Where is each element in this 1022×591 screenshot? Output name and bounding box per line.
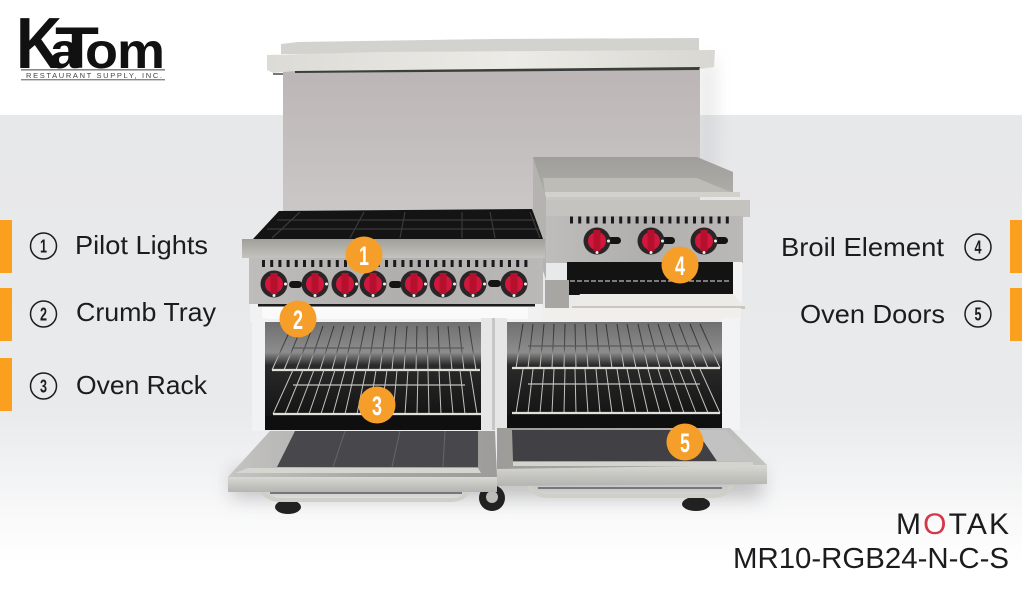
caster wheels [275,485,710,514]
legend item 4: Broil Element: 4 [974,238,982,258]
logo: KaTom Restaurant Supply: a [50,23,80,79]
brand and model number: MR10-RGB24-N-C-S [733,543,1009,575]
callout badge 1 [346,236,382,274]
brand and model number: MOTAK [896,508,1009,541]
legend item 1: Pilot Lights: Pilot Lights [75,230,208,260]
callout badge 4: 4 [675,251,685,281]
callout badge 5 [666,424,704,460]
callout badge 1: 1 [359,241,369,271]
legend item 3: Oven Rack: Oven Rack [76,370,208,400]
callout badge 2 [280,300,316,338]
callout badge 5: 5 [680,428,690,458]
logo: KaTom Restaurant Supply: T [55,16,99,81]
callout badge 4 [662,246,698,284]
legend item 5: Oven Doors: Oven Doors [800,299,945,329]
logo: KaTom Restaurant Supply: K [16,4,62,84]
frame and crumb tray [250,304,741,431]
logo: KaTom Restaurant Supply [16,4,165,84]
logo: KaTom Restaurant Supply: m [117,23,165,79]
soft shadows [232,60,762,498]
left oven cavity with racks [265,322,481,430]
callout badge 3: 3 [372,391,382,421]
left oven door [228,431,497,500]
range front rail and control panel [242,239,545,304]
right orange tabs [1010,220,1022,341]
griddle [533,157,750,280]
logo: KaTom Restaurant Supply: o [85,23,118,79]
legend item 2: Crumb Tray: Crumb Tray [76,297,216,327]
legend item 2: Crumb Tray: 2 [40,304,47,324]
callout badge 2: 2 [293,305,303,335]
logo: KaTom Restaurant Supply: RESTAURANT SUPPLY, INC. [26,71,162,80]
brand and model number [733,508,1009,575]
product: restaurant range [228,38,767,514]
right oven door [497,428,767,496]
backsplash and shelf [267,38,715,218]
broiler cavity and tray [545,262,745,315]
legend item 5: Oven Doors: 5 [974,304,982,324]
right oven cavity with racks [507,322,722,430]
burner knobs [260,270,528,298]
legend item 1: Pilot Lights: 1 [40,236,47,256]
burner top [253,209,543,239]
callout badge 3 [358,386,396,424]
left orange tabs [0,220,12,411]
griddle knobs [584,228,728,254]
legend item 4: Broil Element: Broil Element [781,232,945,262]
legend item 3: Oven Rack: 3 [40,376,47,396]
